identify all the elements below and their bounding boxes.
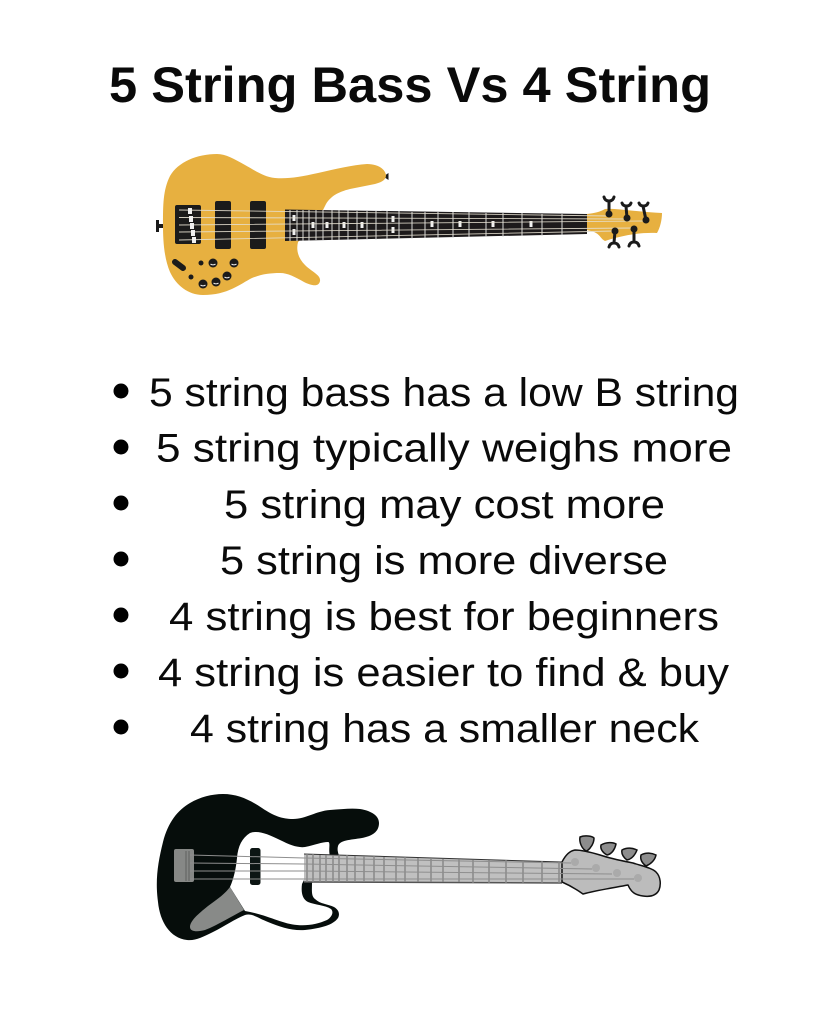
headstock [562, 850, 660, 896]
pickup [250, 848, 260, 885]
guitar body [157, 794, 379, 940]
illustration: black 4 string bass [157, 794, 660, 940]
bridge saddles [188, 208, 196, 243]
title: 5 String Bass Vs 4 String [109, 57, 711, 113]
bridge [174, 849, 194, 882]
illustration: yellow 5 string bass [156, 154, 662, 295]
bullet item 5: 4 string is best for beginners [169, 595, 719, 639]
pickups [175, 205, 201, 244]
frets [307, 854, 559, 883]
bullet item 1: 5 string bass has a low B string [149, 371, 739, 415]
neck [304, 854, 562, 883]
inlays [292, 215, 532, 235]
peg posts [571, 858, 642, 882]
controls [175, 262, 183, 268]
strap pins [156, 173, 388, 232]
tuning pegs [604, 197, 650, 247]
headstock [587, 209, 662, 241]
strings [179, 210, 646, 240]
frets [290, 210, 562, 241]
tuning pegs [580, 836, 656, 866]
pickguard [230, 832, 332, 925]
bullet item 7: 4 string has a smaller neck [190, 707, 700, 751]
bullet item 3: 5 string may cost more [224, 483, 665, 527]
strings [190, 855, 634, 879]
bullet list [114, 371, 739, 751]
gray thumb plate [190, 887, 244, 931]
bullet item 4: 5 string is more diverse [220, 539, 668, 583]
fretboard [285, 210, 587, 241]
bullet item 6: 4 string is easier to find & buy [158, 651, 729, 695]
guitar body [163, 154, 386, 295]
bullet item 2: 5 string typically weighs more [156, 426, 732, 470]
